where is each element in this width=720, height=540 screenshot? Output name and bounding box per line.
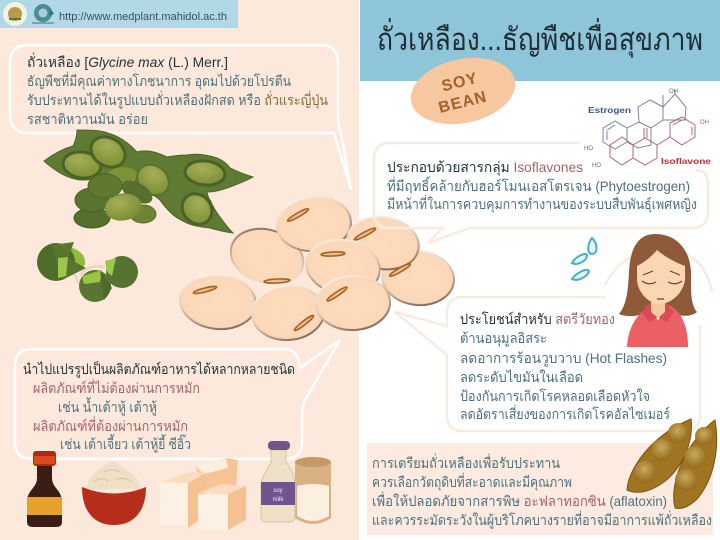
speech bubble: menopause benefits: ประโยชน์สำหรับ สตรีวัยทอง [460,311,615,327]
speech bubble: products: เช่น เต้าเจี้ยว เต้าหู้ยี้ ซีอิ๊ว [60,434,191,453]
panel: preparation advice: เพื่อให้ปลอดภัยจากสารพิษ อะฟลาทอกซิน (aflatoxin) [372,492,667,509]
structure labels: Estrogen [588,106,631,115]
speech bubble: products [15,340,340,459]
speech bubble: soybean description: ถั่วเหลือง [Glycine max (L.) Merr.] [27,53,228,70]
header band with logos and URL [0,0,238,28]
speech bubble: menopause benefits: ลดอัตราเสี่ยงของการเกิดโรคอัลไซเมอร์ [460,405,670,422]
speech bubble: menopause benefits: ป้องกันการเกิดโรคหลอดเลือดหัวใจ [460,388,650,404]
illustration: green soybean pods [44,130,253,233]
structure labels: HO [592,163,601,169]
speech bubble: soybean description: รับประทานได้ในรูปแบบถั่วเหลืองฝักสด หรือ ถั่วแระญี่ปุ่น [27,91,328,109]
icon: bowl of fermented soybean paste [82,462,146,525]
icon: soy milk bottle: soy [273,488,283,494]
panel: preparation advice: ควรเลือกวัตถุดิบที่สะอาดและมีคุณภาพ [372,473,572,491]
icon: soy milk bottle [261,441,295,522]
speech bubble: isoflavones: ประกอบด้วยสารกลุ่ม Isoflavones [387,159,583,176]
icon: soy sauce bottle [27,451,62,527]
soy bean badge: SOY [440,70,480,95]
speech bubble: menopause benefits: ลดอาการร้อนวูบวาบ (Hot Flashes) [460,350,667,367]
soy bean badge: BEAN [437,88,489,117]
icon: faculty logo [32,4,54,24]
illustration: green bean sprouts [37,242,138,302]
estrogen skeleton [603,90,686,149]
structure labels: OH [700,120,709,126]
speech bubble: soybean description: รสชาติหวานมัน อร่อย [27,111,148,127]
URL text: http://www.medplant.mahidol.ac.th [59,11,227,23]
speech bubble: isoflavones [374,143,708,243]
chemical structure: estrogen and isoflavone [584,89,712,169]
structure labels: HO [584,146,593,152]
title band [360,0,720,81]
soy bean badge [405,49,521,133]
icon: soy milk bottle: milk [273,497,284,503]
icon: glass of soy milk [295,457,331,524]
speech bubble: products: เช่น น้ำเต้าหู้ เต้าหู้ [58,397,157,416]
speech bubble: soybean description: ธัญพืชที่มีคุณค่าทางโภชนาการ อุดมไปด้วยโปรตีน [27,72,291,90]
background: right white panel [359,0,720,540]
structure labels [584,89,712,169]
icon: sweat drops [572,238,596,280]
illustration: dried brown soybean pods [627,419,717,509]
speech bubble: menopause benefits [395,250,712,431]
speech bubble: soybean description [10,45,351,190]
speech bubble: isoflavones: ที่มีฤทธิ์คล้ายกับฮอร์โมนเอสโตรเจน (Phytoestrogen) [387,176,690,194]
speech bubble: menopause benefits: ต้านอนุมูลอิสระ [460,330,547,347]
speech bubble: products: ผลิตภัณฑ์ที่ต้องผ่านการหมัก [33,417,188,434]
closed eyes and mouth [642,271,682,299]
background: left peach panel [0,0,359,540]
structure labels: OH [669,89,678,95]
isoflavone skeleton [610,117,695,165]
illustration: woman with closed eyes [619,234,697,347]
panel: preparation advice [367,443,713,535]
speech bubble: products: ผลิตภัณฑ์ที่ไม่ต้องผ่านการหมัก [33,379,200,396]
icon: tofu blocks [160,458,246,530]
pod seeds [61,131,226,230]
illustration: cluster of soybeans [177,194,457,342]
speech bubble: menopause benefits: ลดระดับไขมันในเลือด [460,369,583,385]
speech bubble: products: นำไปแปรรูปเป็นผลิตภัณฑ์อาหารได้หลากหลายชนิด [23,360,295,378]
icon: institute logo [3,2,27,26]
structure labels: Isoflavone [661,157,712,166]
panel: preparation advice: การเตรียมถั่วเหลืองเพื่อรับประทาน [372,454,560,471]
